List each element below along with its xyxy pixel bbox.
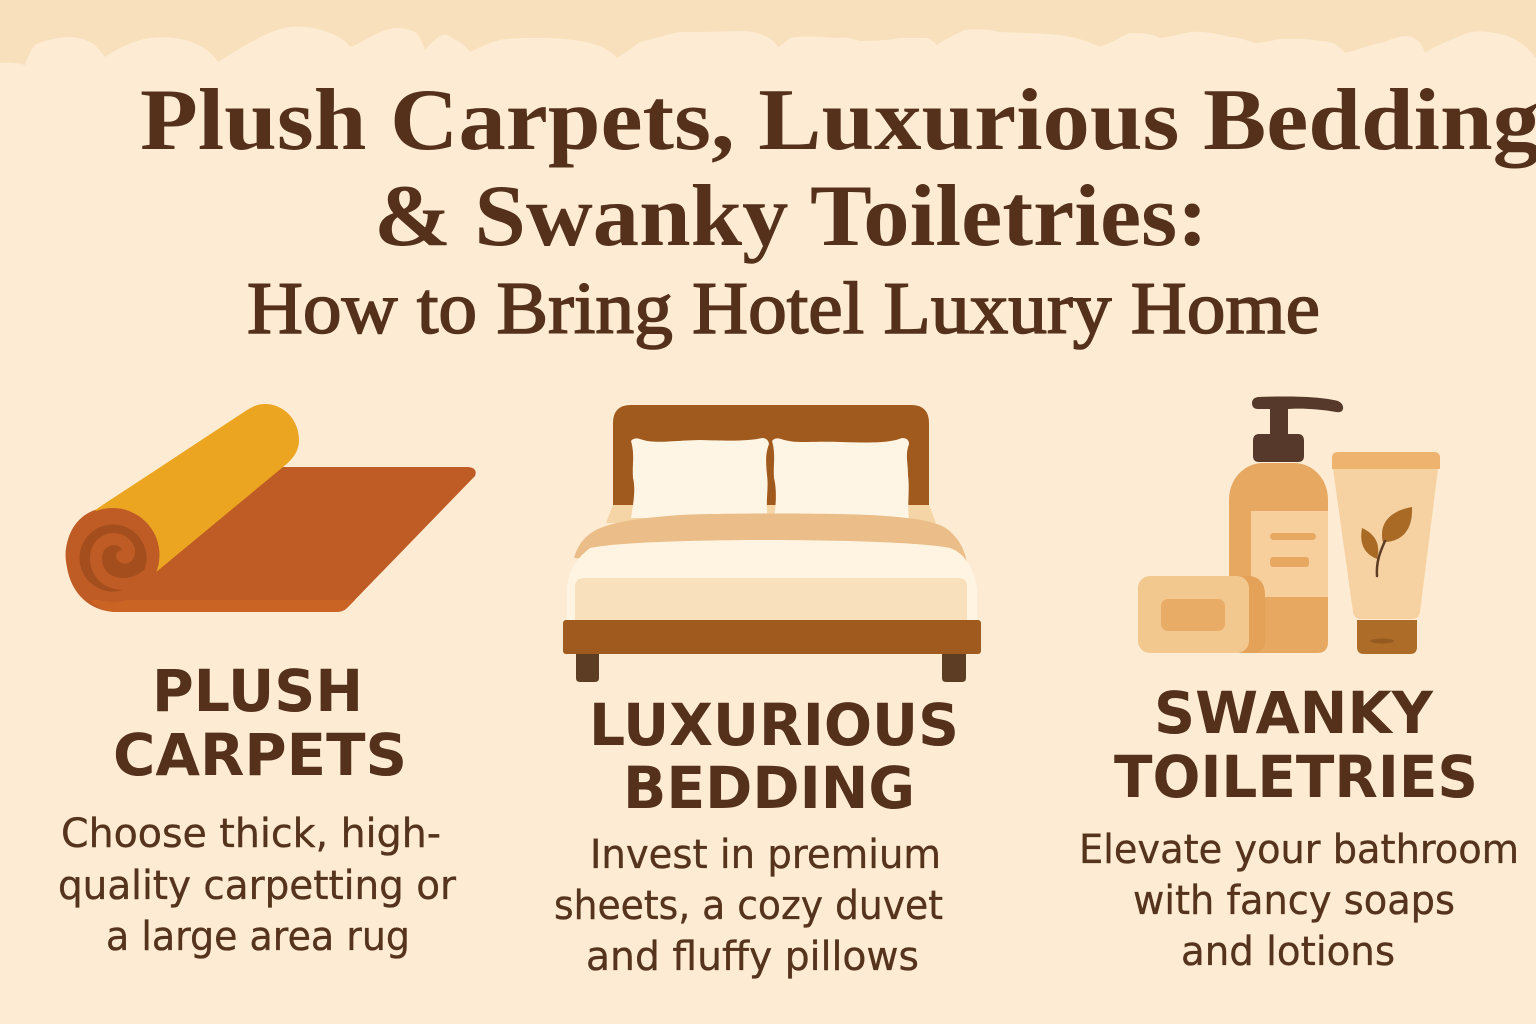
title: [140, 72, 1536, 265]
heading: luxurious bedding: LUXURIOUS: [589, 691, 959, 759]
icon: bed: [563, 405, 981, 682]
icon: toiletries set: [1138, 396, 1440, 654]
text: plush carpets description: Choose thick, high-: [61, 811, 441, 857]
heading: plush carpets: PLUSH: [152, 657, 363, 725]
text: swanky toiletries description: Elevate your bathroom: [1079, 827, 1519, 873]
text: swanky toiletries description: with fancy soaps: [1133, 878, 1455, 924]
torn paper header band: [0, 0, 1536, 65]
text: plush carpets description: [58, 811, 457, 960]
text: swanky toiletries description: and lotions: [1181, 929, 1395, 975]
title: & Swanky Toiletries:: [374, 168, 1208, 265]
text: luxurious bedding description: [554, 832, 943, 980]
heading: swanky toiletries: SWANKY: [1154, 679, 1434, 747]
text: swanky toiletries description: [1079, 827, 1519, 975]
panel: plush carpets: [58, 404, 476, 960]
text: plush carpets description: a large area rug: [106, 914, 410, 960]
title: Plush Carpets, Luxurious Bedding: [140, 72, 1536, 169]
text: luxurious bedding description: and fluffy pillows: [586, 934, 919, 980]
panel: swanky toiletries: [1079, 396, 1519, 975]
text: luxurious bedding description: Invest in premium: [590, 832, 941, 878]
heading: swanky toiletries: [1114, 679, 1478, 811]
heading: plush carpets: [113, 657, 407, 789]
icon: rolled carpet: [66, 404, 476, 612]
panel: luxurious bedding: [554, 405, 981, 980]
heading: luxurious bedding: BEDDING: [623, 754, 915, 822]
heading: luxurious bedding: [589, 691, 959, 822]
text: luxurious bedding description: sheets, a cozy duvet: [554, 883, 943, 929]
subtitle: How to Bring Hotel Luxury Home: [247, 268, 1320, 350]
text: plush carpets description: quality carpetting or: [58, 863, 457, 909]
heading: plush carpets: CARPETS: [113, 721, 407, 789]
heading: swanky toiletries: TOILETRIES: [1114, 743, 1478, 811]
